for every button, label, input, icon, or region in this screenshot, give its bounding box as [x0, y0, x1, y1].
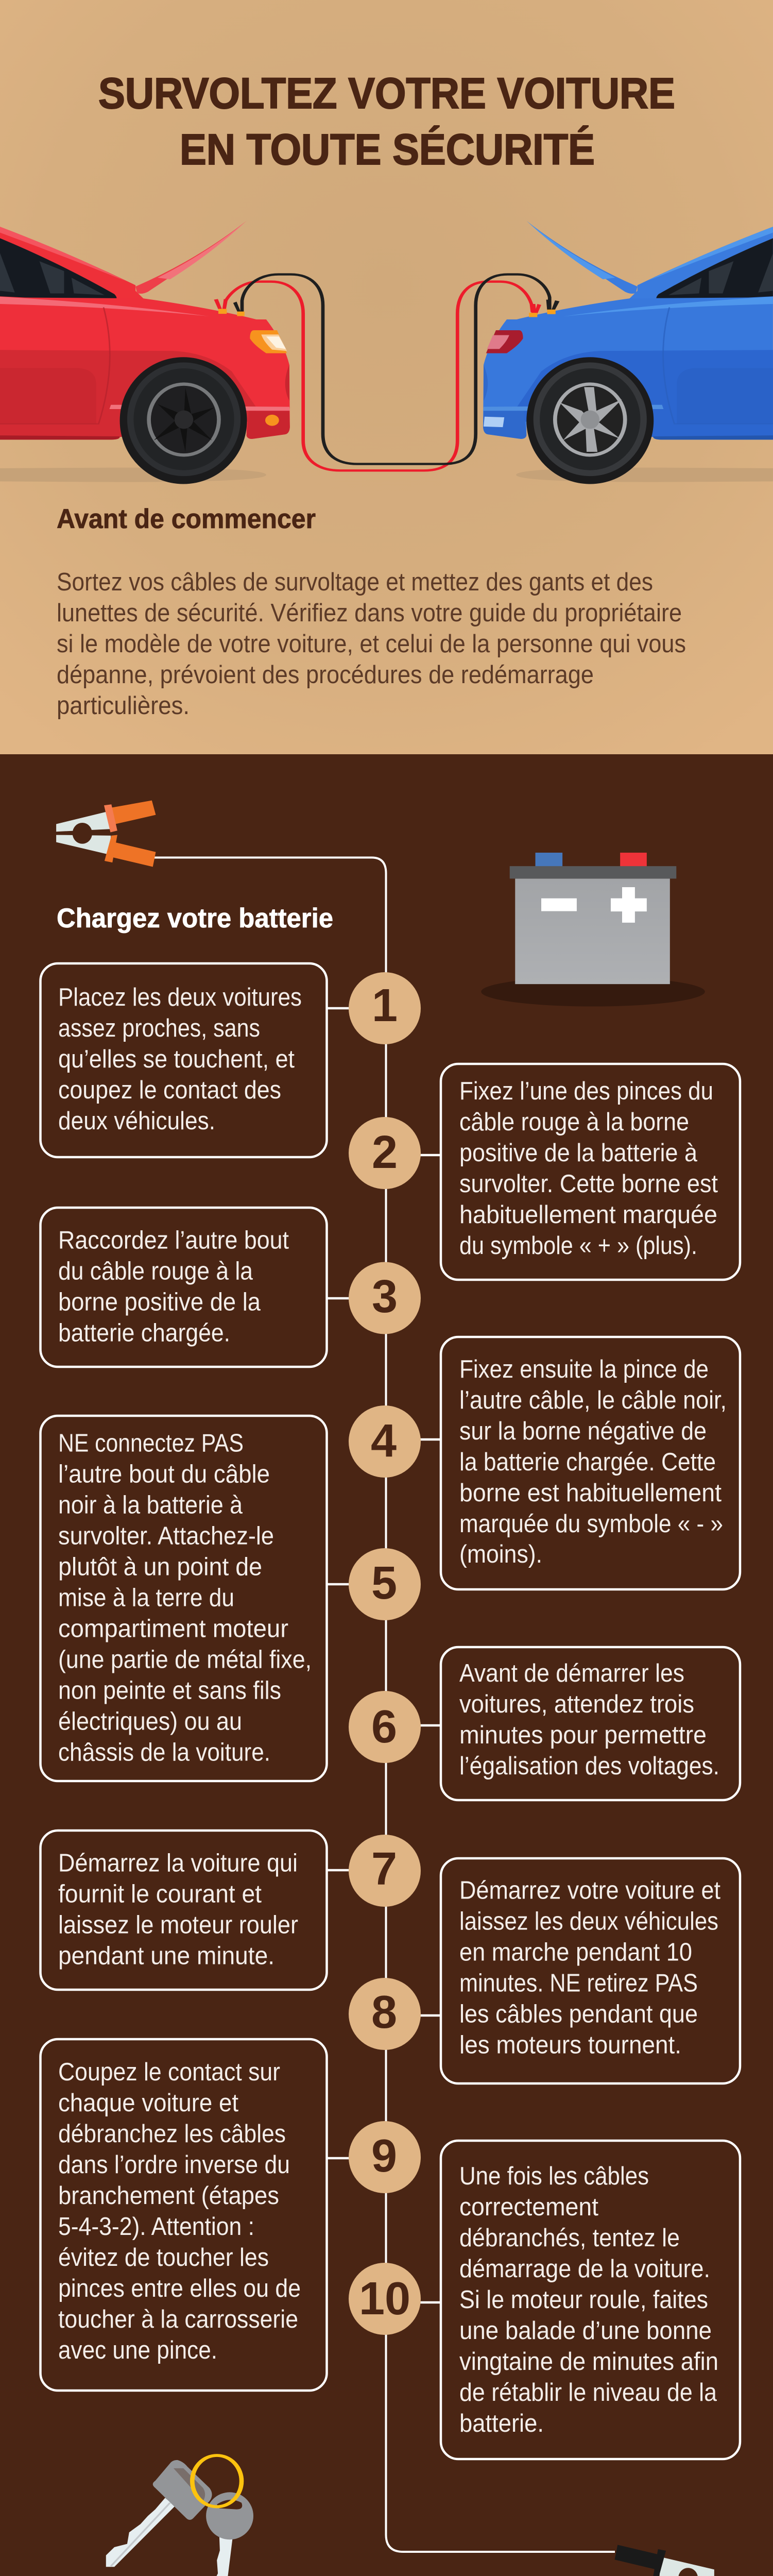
step number 5	[349, 1548, 421, 1620]
intro text block	[57, 568, 686, 720]
step 5 box: électriques) ou au	[58, 1707, 242, 1735]
step 5 box: (une partie de métal fixe,	[58, 1646, 312, 1673]
step 8 box: en marche pendant 10	[459, 1938, 692, 1966]
step 4 box: borne est habituellement	[459, 1479, 722, 1507]
step 7 box: fournit le courant et	[58, 1880, 262, 1908]
step 9 box: dans l’ordre inverse du	[58, 2151, 290, 2179]
step 6 box: Avant de démarrer les	[459, 1659, 684, 1687]
step 2 box: positive de la batterie à	[459, 1139, 698, 1167]
step 10 box: vingtaine de minutes afin	[459, 2348, 718, 2376]
step 2 box: Fixez l’une des pinces du	[459, 1077, 713, 1105]
step number 1: 1	[372, 980, 398, 1031]
step 9 box: branchement (étapes	[58, 2182, 279, 2210]
step number 9	[349, 2121, 421, 2193]
step 9 box: chaque voiture et	[58, 2089, 238, 2117]
step 5 box: non peinte et sans fils	[58, 1676, 281, 1704]
step 5 box: mise à la terre du	[58, 1584, 234, 1612]
step 5 box: survolter. Attachez-le	[58, 1522, 274, 1550]
step 1 box: Placez les deux voitures	[58, 984, 302, 1011]
step 4 box: Fixez ensuite la pince de	[459, 1355, 709, 1383]
step 9 box: débranchez les câbles	[58, 2120, 286, 2148]
step number 4	[349, 1405, 421, 1478]
illustration: cars connected with jumper cables	[0, 221, 773, 484]
step 5 box: noir à la batterie à	[58, 1491, 243, 1519]
step 2 box	[441, 1064, 740, 1280]
step 7 box	[40, 1831, 327, 1990]
step 2 box: survolter. Cette borne est	[459, 1170, 718, 1198]
step 4 box: (moins).	[459, 1540, 542, 1568]
step number 7	[349, 1835, 421, 1907]
step 4 box: marquée du symbole « - »	[459, 1510, 723, 1538]
step 10 box: batterie.	[459, 2410, 544, 2437]
icon: jumper cables	[225, 275, 549, 470]
step 2 box: habituellement marquée	[459, 1201, 717, 1229]
step 8 box: minutes. NE retirez PAS	[459, 1969, 698, 1997]
step 4 box: sur la borne négative de	[459, 1417, 707, 1445]
step number 2: 2	[372, 1127, 398, 1178]
step 10 box: Une fois les câbles	[459, 2162, 649, 2190]
step 3 box: Raccordez l’autre bout	[58, 1226, 289, 1254]
icon: red car	[0, 221, 290, 484]
step 5 box: plutôt à un point de	[58, 1553, 262, 1581]
title	[98, 69, 675, 174]
step 9 box: Coupez le contact sur	[58, 2058, 280, 2086]
intro text block: si le modèle de votre voiture, et celui de la personne qui vous	[57, 630, 686, 658]
intro text block: Sortez vos câbles de survoltage et mettez des gants et des	[57, 568, 653, 596]
step 10 box: débranchés, tentez le	[459, 2224, 680, 2252]
step 9 box: 5-4-3-2). Attention :	[58, 2213, 254, 2241]
step number 6: 6	[371, 1701, 397, 1753]
title: SURVOLTEZ VOTRE VOITURE	[98, 69, 675, 117]
step number 1	[349, 972, 421, 1044]
icon: blue car	[483, 221, 773, 484]
step 9 box: avec une pince.	[58, 2336, 217, 2364]
icon: car battery	[481, 853, 705, 1007]
step 10 box: de rétablir le niveau de la	[459, 2379, 717, 2406]
step 5 box: compartiment moteur	[58, 1615, 288, 1642]
step 8 box: Démarrez votre voiture et	[459, 1876, 720, 1904]
step 6 box: l’égalisation des voltages.	[459, 1752, 719, 1780]
ground shadows	[0, 468, 773, 482]
step number 3: 3	[372, 1271, 398, 1323]
icon: blue car front wheel	[534, 362, 647, 476]
step 10 box: Si le moteur roule, faites	[459, 2286, 708, 2314]
step 1 box: coupez le contact des	[58, 1076, 281, 1104]
step number 8	[349, 1978, 421, 2050]
step 6 box: minutes pour permettre	[459, 1721, 707, 1749]
step 9 box: évitez de toucher les	[58, 2244, 269, 2272]
background: top tan section	[0, 0, 773, 754]
step 9 box: pinces entre elles ou de	[58, 2275, 301, 2302]
step 8 box: laissez les deux véhicules	[459, 1907, 718, 1935]
step 7 box: pendant une minute.	[58, 1942, 274, 1970]
step 8 box	[441, 1858, 740, 2083]
step 1 box	[40, 963, 327, 1157]
step number 2	[349, 1117, 421, 1189]
icon: orange cable clamp	[56, 801, 156, 867]
step number 10	[349, 2263, 421, 2335]
intro text block: dépanne, prévoient des procédures de redémarrage	[57, 661, 594, 689]
connectors: step boxes to circles	[327, 1008, 440, 2302]
step number 3	[349, 1262, 421, 1334]
step number 4: 4	[371, 1415, 397, 1467]
step 3 box: borne positive de la	[58, 1288, 261, 1316]
step 10 box: correctement	[459, 2193, 598, 2221]
step 1 box: deux véhicules.	[58, 1107, 215, 1135]
step 2 box: câble rouge à la borne	[459, 1108, 689, 1136]
step number 7: 7	[371, 1843, 397, 1895]
step 9 box	[40, 2039, 327, 2391]
icon: red car front wheel	[127, 362, 241, 476]
timeline wire	[154, 857, 615, 2552]
step number 9: 9	[371, 2130, 397, 2182]
step 4 box	[441, 1337, 740, 1589]
step 3 box: batterie chargée.	[58, 1319, 230, 1347]
icon: cable clips on batteries	[214, 299, 559, 317]
step 5 box: NE connectez PAS	[58, 1429, 244, 1457]
background: dark steps section	[0, 754, 773, 2576]
step number 5: 5	[371, 1557, 397, 1609]
step 10 box: une balade d’une bonne	[459, 2317, 712, 2345]
step 5 box: châssis de la voiture.	[58, 1738, 270, 1766]
step 10 box: démarrage de la voiture.	[459, 2255, 710, 2283]
heading: Chargez votre batterie: Chargez votre batterie	[57, 903, 333, 934]
step 6 box	[441, 1647, 740, 1800]
title: EN TOUTE SÉCURITÉ	[180, 125, 595, 174]
step 8 box: les moteurs tournent.	[459, 2031, 681, 2059]
step 1 box: assez proches, sans	[58, 1014, 260, 1042]
step 5 box	[40, 1416, 327, 1781]
step 6 box: voitures, attendez trois	[459, 1690, 694, 1718]
icon: car keys	[106, 2455, 253, 2576]
step 7 box: Démarrez la voiture qui	[58, 1850, 298, 1877]
step 9 box: toucher à la carrosserie	[58, 2306, 298, 2333]
step number 6	[349, 1691, 421, 1763]
step number 8: 8	[371, 1987, 397, 2038]
step 5 box: l’autre bout du câble	[58, 1460, 270, 1488]
step 4 box: la batterie chargée. Cette	[459, 1448, 716, 1476]
step 10 box	[441, 2141, 740, 2459]
step 4 box: l’autre câble, le câble noir,	[459, 1386, 727, 1414]
step number 10: 10	[359, 2273, 410, 2325]
step 2 box: du symbole « + » (plus).	[459, 1232, 697, 1260]
step 8 box: les câbles pendant que	[459, 2000, 698, 2028]
step 7 box: laissez le moteur rouler	[58, 1911, 298, 1939]
heading: Avant de commencer: Avant de commencer	[57, 504, 316, 534]
icon: black cable clamp	[615, 2545, 714, 2576]
intro text block: lunettes de sécurité. Vérifiez dans votre guide du propriétaire	[57, 599, 682, 627]
intro text block: particulières.	[57, 692, 190, 720]
step 1 box: qu’elles se touchent, et	[58, 1045, 295, 1073]
step 3 box	[40, 1208, 327, 1367]
step 3 box: du câble rouge à la	[58, 1257, 253, 1285]
